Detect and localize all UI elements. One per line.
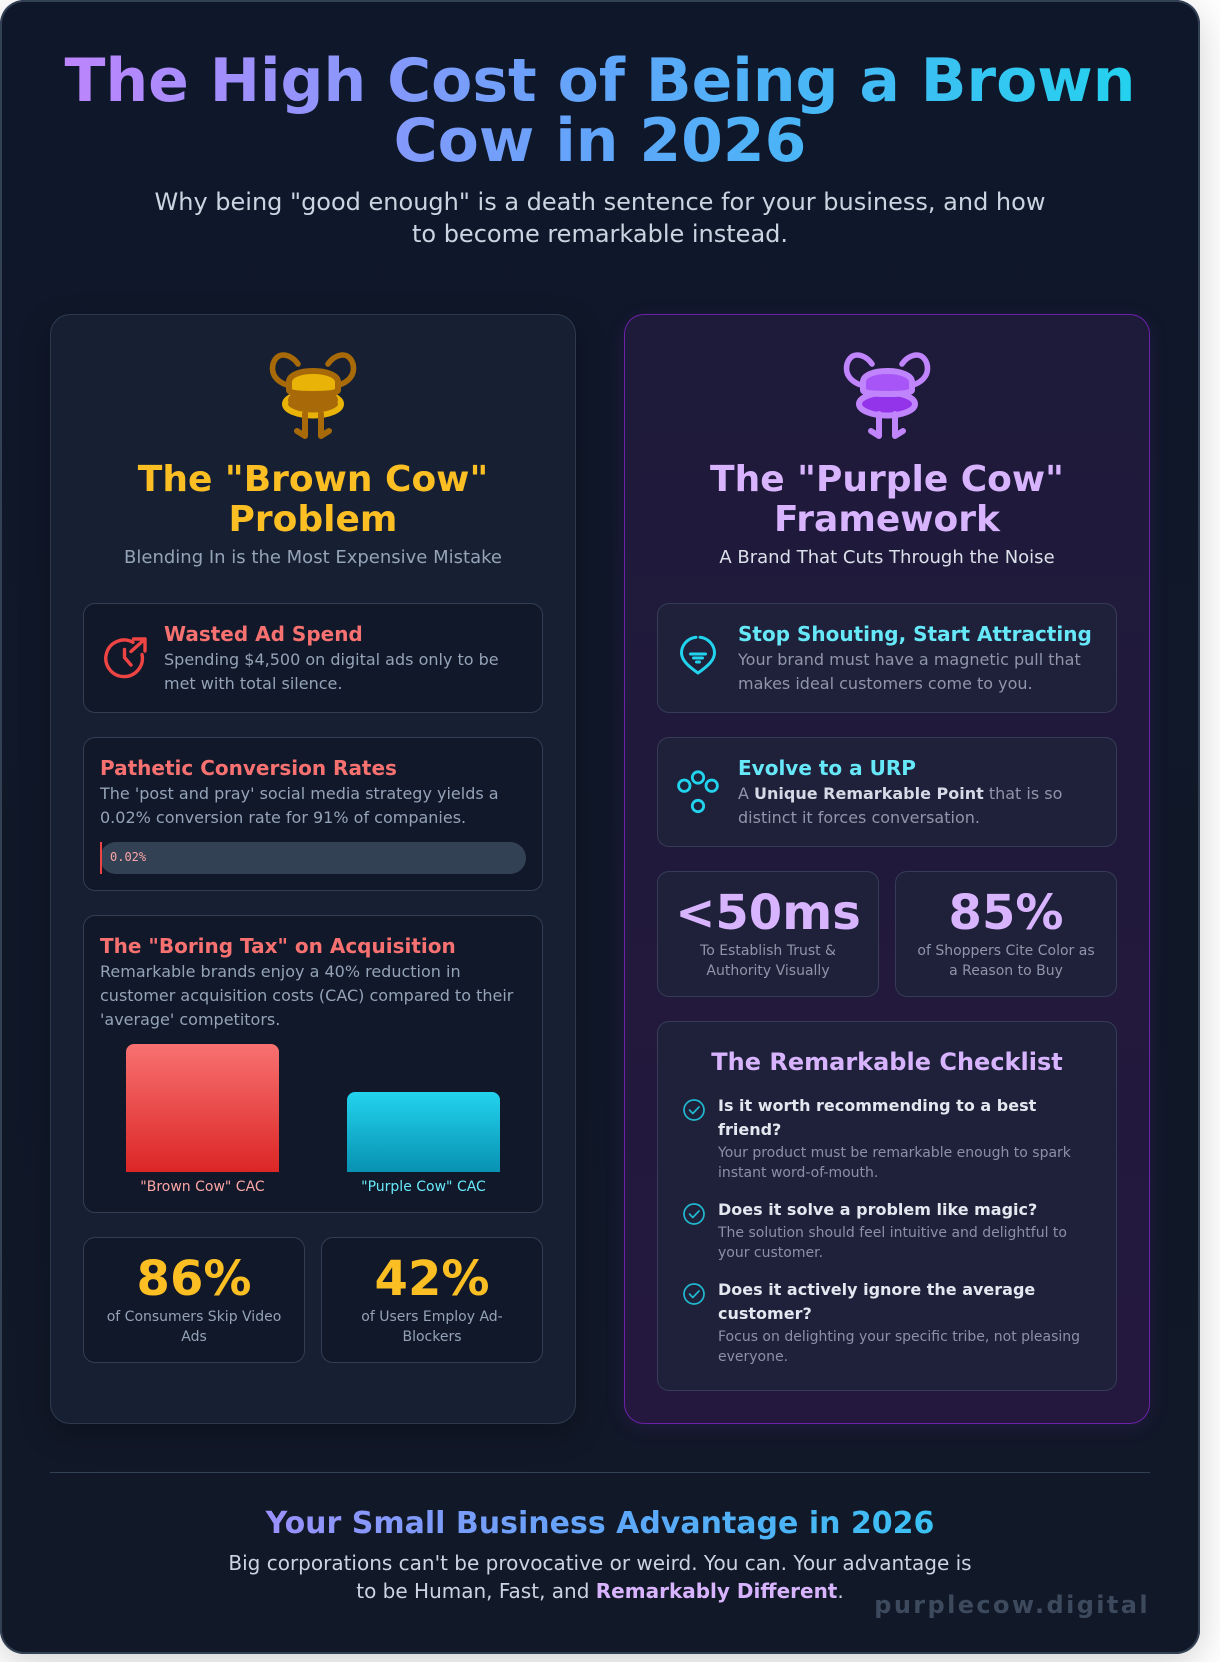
title: The High Cost of Being a Brown (65, 46, 1135, 116)
item description: your customer. (718, 1245, 823, 1261)
checklist item 1 (683, 1096, 1071, 1181)
stat label: of Users Employ Ad- (361, 1309, 503, 1325)
icon: check circle (683, 1283, 705, 1305)
card text: makes ideal customers come to you. (738, 674, 1033, 693)
item description: everyone. (718, 1349, 788, 1365)
heading: brown cow: The "Brown Cow" (138, 459, 488, 500)
stat label: Authority Visually (706, 963, 830, 979)
subtitle (155, 188, 1045, 248)
item description (718, 1145, 1071, 1181)
footer (228, 1506, 972, 1603)
item description (718, 1225, 1067, 1261)
stat: 85% (895, 871, 1117, 997)
card text (100, 962, 514, 1029)
card text: met with total silence. (164, 674, 342, 693)
subheading: purple cow: A Brand That Cuts Through the Noise (719, 547, 1055, 568)
item description (718, 1329, 1080, 1365)
stat: 42% (321, 1237, 543, 1363)
stat label: Blockers (402, 1329, 462, 1345)
progress value: 0.02% (110, 850, 146, 864)
card text: Your brand must have a magnetic pull that (738, 650, 1081, 669)
footer text: Big corporations can't be provocative or weird. You can. Your advantage is (228, 1551, 972, 1575)
card text: Remarkable brands enjoy a 40% reduction in (100, 962, 461, 981)
card text: distinct it forces conversation. (738, 808, 980, 827)
bar: brown cow CAC (126, 1044, 279, 1172)
stat label: Ads (181, 1329, 207, 1345)
item description: Focus on delighting your specific tribe, not pleasing (718, 1329, 1080, 1345)
card text (738, 784, 1062, 827)
bar label: brown cow: "Brown Cow" CAC (140, 1178, 265, 1194)
card: boring tax (83, 915, 543, 1213)
card text: A Unique Remarkable Point that is so (738, 784, 1062, 803)
checklist item 3 (683, 1280, 1080, 1365)
icon: target clock arrow (104, 637, 147, 678)
footer text (228, 1551, 972, 1603)
panel: purple cow framework (624, 314, 1150, 1424)
stat label (107, 1309, 281, 1345)
footer heading (50, 1506, 1150, 1542)
item heading (718, 1280, 1035, 1322)
stat label: a Reason to Buy (949, 963, 1063, 979)
stat: 86% (83, 1237, 305, 1363)
stat number: 42% (375, 1251, 489, 1307)
card text (164, 650, 499, 693)
stat label: To Establish Trust & (700, 943, 836, 959)
heading: purple cow: The "Purple Cow" (710, 459, 1064, 500)
card: stop shouting (657, 603, 1117, 713)
card text: The 'post and pray' social media strategy yields a (100, 784, 499, 803)
item heading: Does it actively ignore the average (718, 1280, 1035, 1298)
watermark: purplecow.digital (874, 1591, 1150, 1619)
footer text: to be Human, Fast, and Remarkably Different. (356, 1579, 844, 1603)
checklist item 2 (683, 1200, 1067, 1261)
footer heading: Your Small Business Advantage in 2026 (266, 1506, 934, 1541)
stat label (700, 943, 836, 979)
stat label (361, 1309, 503, 1345)
stat number: 85% (949, 885, 1063, 941)
panel: brown cow problem (50, 314, 576, 1424)
card text (100, 784, 499, 827)
icon: check circle (683, 1203, 705, 1225)
heading: brown cow: Problem (229, 499, 397, 540)
checklist heading: The Remarkable Checklist (711, 1048, 1063, 1076)
panel: remarkable checklist (657, 1021, 1117, 1391)
title: Cow in 2026 (394, 106, 806, 176)
card heading: Stop Shouting, Start Attracting (738, 622, 1092, 646)
bar chart: CAC comparison (126, 1044, 500, 1194)
card heading: Evolve to a URP (738, 756, 916, 780)
card heading: The "Boring Tax" on Acquisition (100, 934, 456, 958)
bar label: purple cow: "Purple Cow" CAC (361, 1178, 486, 1194)
progress bar: 0.02% (100, 842, 526, 874)
card text: customer acquisition costs (CAC) compared to their (100, 986, 513, 1005)
item description: The solution should feel intuitive and delightful to (718, 1225, 1067, 1241)
card heading: Wasted Ad Spend (164, 622, 363, 646)
card text: Spending $4,500 on digital ads only to be (164, 650, 499, 669)
item heading (718, 1096, 1036, 1138)
card: evolve to URP (657, 737, 1117, 847)
icon: purple cow (844, 352, 930, 439)
item description: instant word-of-mouth. (718, 1165, 878, 1181)
subtitle: Why being "good enough" is a death sentence for your business, and how (155, 188, 1045, 216)
card: wasted ad spend (83, 603, 543, 713)
subtitle: to become remarkable instead. (412, 220, 788, 248)
heading: purple cow (710, 459, 1064, 540)
card text: 0.02% conversion rate for 91% of companies. (100, 808, 466, 827)
title (50, 51, 1150, 171)
stat label: of Consumers Skip Video (107, 1309, 281, 1325)
stat number: <50ms (675, 885, 861, 941)
stat label (917, 943, 1095, 979)
icon: brown cow (270, 352, 356, 439)
icon: four circles (677, 770, 719, 814)
heading: purple cow: Framework (774, 499, 1000, 540)
stat number: 86% (137, 1251, 251, 1307)
subheading: brown cow: Blending In is the Most Expensive Mistake (124, 547, 502, 568)
item heading: Does it solve a problem like magic? (718, 1200, 1037, 1218)
card: conversion rates (83, 737, 543, 891)
bar: purple cow CAC (347, 1092, 500, 1172)
item heading: customer? (718, 1304, 812, 1322)
icon: check circle (683, 1099, 705, 1121)
card heading: Pathetic Conversion Rates (100, 756, 397, 780)
stat: under 50ms (657, 871, 879, 997)
item heading: friend? (718, 1120, 781, 1138)
item description: Your product must be remarkable enough to spark (718, 1145, 1071, 1161)
stat label: of Shoppers Cite Color as (917, 943, 1095, 959)
icon: magnet pin filter (680, 636, 716, 674)
card text: 'average' competitors. (100, 1010, 280, 1029)
heading: brown cow (138, 459, 488, 540)
card text (738, 650, 1081, 693)
progress fill (100, 842, 102, 874)
item heading: Is it worth recommending to a best (718, 1096, 1036, 1114)
